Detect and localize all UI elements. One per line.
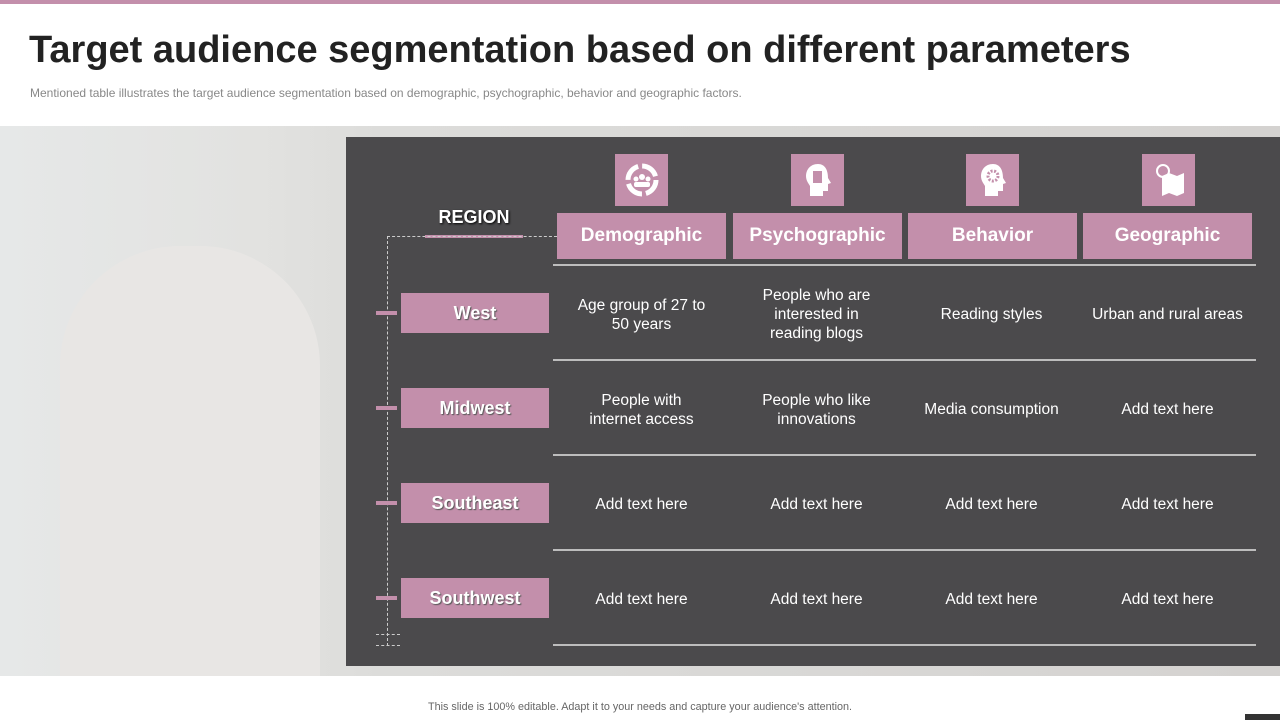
text: Behavior xyxy=(952,225,1033,246)
row: Midwest: innovations xyxy=(777,410,856,428)
row: Southeast: Add text here xyxy=(770,496,863,513)
row: West: Reading styles xyxy=(941,306,1042,323)
region heading: REGION xyxy=(438,207,510,227)
row: West: Age group of 27 to xyxy=(578,296,705,314)
row: Midwest xyxy=(589,392,1214,428)
icon: demographic xyxy=(615,154,668,206)
row: West: People who are xyxy=(763,287,870,304)
text: Psychographic xyxy=(749,225,886,246)
row: Southwest: Add text here xyxy=(770,591,863,608)
row: Midwest: internet access xyxy=(589,410,694,428)
row: Southeast: Add text here xyxy=(1121,496,1214,513)
row: West: reading blogs xyxy=(770,325,863,342)
subtitle: Mentioned table illustrates the target audience segmentation based on demographic, psychographic, behavior and geographic factors. xyxy=(30,86,742,100)
background photo area xyxy=(0,126,1280,676)
dashed connector xyxy=(387,236,557,646)
row: West: 50 years xyxy=(612,316,671,332)
panel: dark table xyxy=(346,137,1280,666)
row: Midwest: People with xyxy=(601,392,682,408)
footer note: This slide is 100% editable. Adapt it to your needs and capture your audience's attention. xyxy=(428,701,852,713)
row: Southwest: Add text here xyxy=(595,591,688,608)
title: Target audience segmentation based on different parameters xyxy=(29,29,1131,71)
column headers xyxy=(557,213,726,259)
row: West: Urban and rural areas xyxy=(1092,306,1243,323)
text: Geographic xyxy=(1115,225,1220,246)
text: Southwest xyxy=(429,588,520,608)
icon: psychographic xyxy=(791,154,844,206)
row separators xyxy=(553,264,1256,266)
column headers: Demographic xyxy=(581,225,702,246)
row: Southeast: Add text here xyxy=(595,496,688,513)
row: West xyxy=(578,287,1243,342)
row: Southeast: Add text here xyxy=(945,496,1038,513)
row: Southwest xyxy=(595,591,1214,608)
text: Southeast xyxy=(431,492,518,512)
row: Southwest: Add text here xyxy=(1121,591,1214,608)
row: West: interested in xyxy=(774,306,859,323)
icon: geographic xyxy=(1142,154,1195,206)
row: Southwest: Add text here xyxy=(945,591,1038,608)
icon: behavior xyxy=(966,154,1019,206)
row: Midwest: Add text here xyxy=(1121,401,1214,418)
top accent bar xyxy=(0,0,1280,4)
row: Midwest: People who like xyxy=(762,392,871,408)
row: Southeast xyxy=(595,496,1214,513)
corner mark xyxy=(1245,714,1280,720)
text: Midwest xyxy=(439,398,510,418)
text: West xyxy=(454,302,496,322)
row: Midwest: Media consumption xyxy=(924,401,1059,418)
row labels xyxy=(376,311,397,315)
